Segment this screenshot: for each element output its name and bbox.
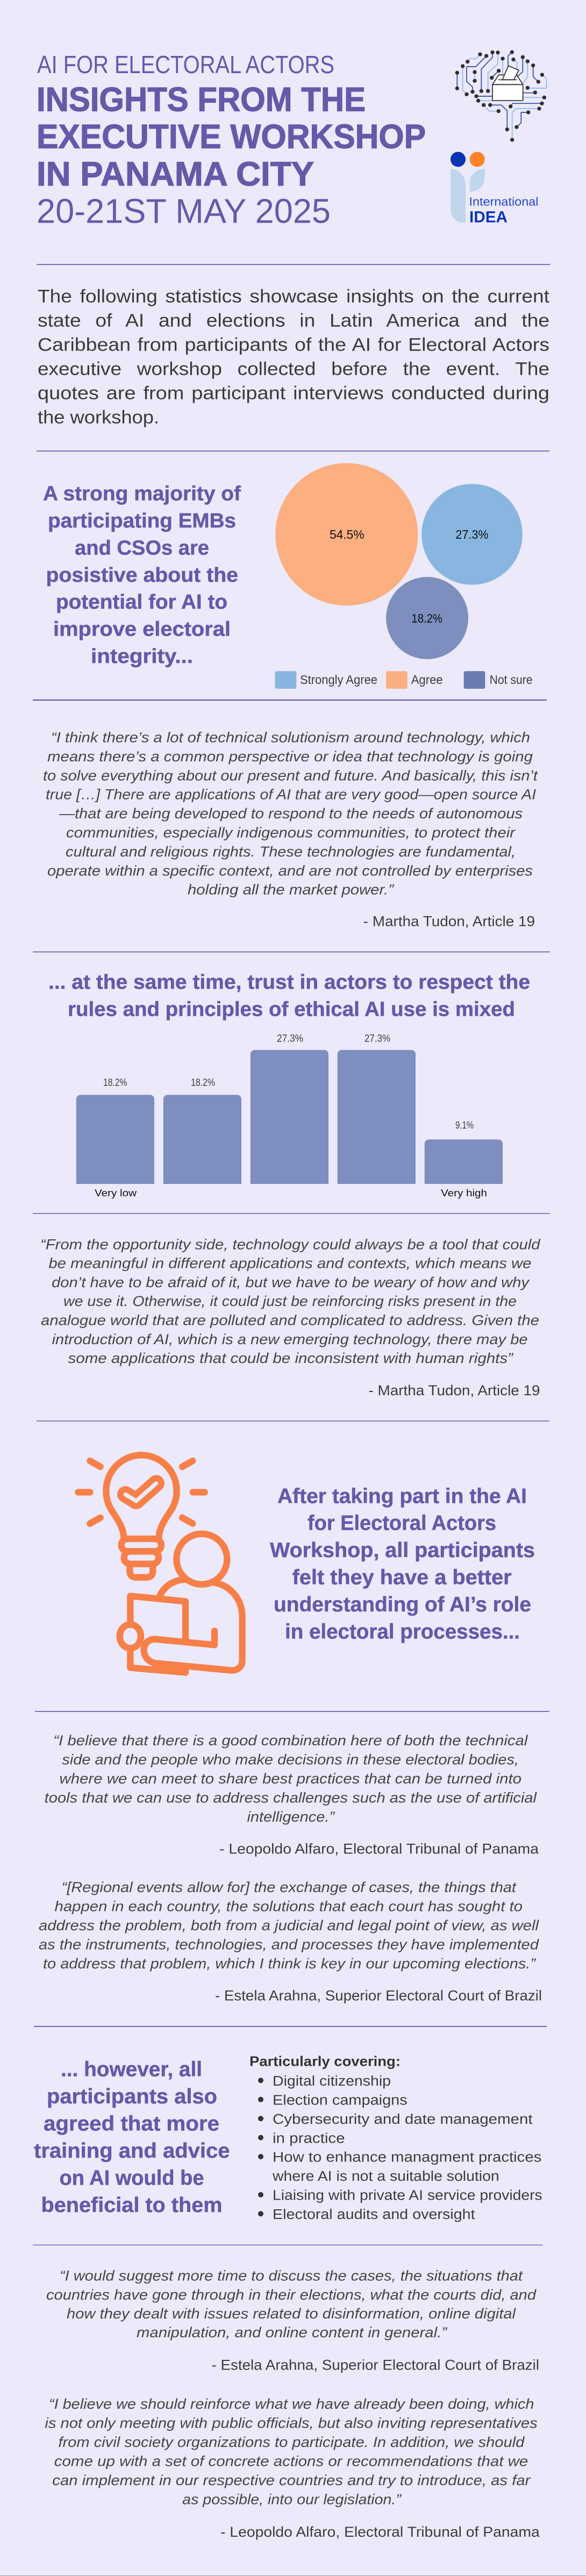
quote 5 attribution: - Estela Arahna, Superior Electoral Court of Brazil (212, 2357, 539, 2373)
quote 3: tools that we can use to address challenges such as the use of artificial (45, 1789, 537, 1806)
quote 2: introduction of AI, which is a new emerging technology, there may be (52, 1331, 528, 1347)
title: event name: AI FOR ELECTORAL ACTORS (37, 51, 334, 79)
quote 1: —that are being developed to respond to the needs of autonomous (59, 805, 523, 822)
bar chart: trust in actors (76, 1033, 503, 1198)
quote 2: we use it. Otherwise, it could just be reinforcing risks present in the (63, 1293, 517, 1309)
quote 1 (43, 729, 539, 929)
quote 6 attribution: - Leopoldo Alfaro, Electoral Tribunal of Panama (220, 2524, 540, 2540)
quote 6: is not only meeting with public officials, but also inviting representatives (45, 2415, 538, 2431)
heading: better understanding: After taking part in the AI (277, 1485, 527, 1508)
bubble chart: 27.3% (455, 527, 489, 541)
quote 3 (45, 1732, 539, 1857)
heading: more training needed: agreed that more (44, 2113, 219, 2136)
quote 2: “From the opportunity side, technology could always be a tool that could (40, 1236, 541, 1252)
heading: more training needed: on AI would be (59, 2167, 204, 2190)
chart legend: Strongly Agree (300, 673, 377, 687)
quote 2: analogue world that are polluted and complicated to address. Given the (41, 1312, 539, 1328)
intro paragraph (38, 286, 550, 427)
bubble chart: 18.2% (411, 611, 442, 625)
title: main heading: EXECUTIVE WORKSHOP (37, 118, 426, 156)
heading: more training needed: ... however, all (61, 2058, 202, 2081)
list: particularly covering: Election campaigns (273, 2093, 408, 2108)
quote 4 attribution: - Estela Arahna, Superior Electoral Court of Brazil (215, 1987, 542, 2003)
quote 1 attribution: - Martha Tudon, Article 19 (363, 913, 535, 929)
quote 1: to solve everything about our present and future. And basically, this isn’t (43, 767, 539, 783)
list: particularly covering: Electoral audits and oversight (273, 2207, 475, 2222)
heading: more training needed: training and advice (34, 2139, 230, 2163)
heading: strong majority positive (43, 483, 241, 668)
quote 4: address the problem, both from a judicial and legal point of view, as well (39, 1917, 539, 1933)
quote 5: “I would suggest more time to discuss the cases, the situations that (60, 2268, 524, 2284)
quote 4 (39, 1879, 542, 2003)
quote 2: be meaningful in different applications and contexts, which means we (48, 1255, 531, 1272)
icon: lightbulb and person with document (78, 1455, 242, 1673)
logo: International IDEA: International (469, 195, 539, 209)
bar chart: trust in actors: Very low (95, 1187, 137, 1198)
icon: circuit brain with ballot box (455, 50, 547, 142)
quote 2 attribution: - Martha Tudon, Article 19 (369, 1382, 540, 1398)
intro paragraph: state of AI and elections in Latin America and the (38, 310, 549, 331)
intro paragraph: quotes are from participant interviews conducted during (38, 383, 549, 403)
quote 1: holding all the market power.” (188, 882, 394, 898)
title: date: 20-21ST MAY 2025 (37, 191, 331, 230)
quote 4: to address that problem, which I think is key in our upcoming elections.” (43, 1956, 536, 1972)
quote 6: can implement in our respective countries and try to introduce, as far (52, 2472, 531, 2488)
chart legend (275, 671, 533, 689)
heading: more training needed: beneficial to them (41, 2194, 222, 2217)
quote 2: don’t have to be afraid of it, but we have to be weary of how and why (52, 1274, 530, 1290)
list: particularly covering: Liaising with private AI service providers (273, 2188, 542, 2203)
quote 4: as the instruments, technologies, and processes they have implemented (39, 1937, 539, 1953)
quote 5: countries have gone through in their elections, what the courts did, and (46, 2287, 537, 2303)
quote 3: where we can meet to share best practices that can be turned into (59, 1771, 521, 1787)
list: particularly covering (249, 2053, 542, 2222)
list: particularly covering: Particularly covering: (249, 2053, 401, 2069)
bar chart: trust in actors: Very high (441, 1187, 487, 1198)
quote 2: some applications that could be inconsistent with human rights” (68, 1350, 513, 1366)
heading: trust is mixed: ... at the same time, trust in actors to respect the (48, 971, 530, 994)
heading: better understanding: in electoral processes... (285, 1620, 520, 1643)
quote 3 attribution: - Leopoldo Alfaro, Electoral Tribunal of Panama (219, 1841, 539, 1857)
quote 6: come up with a set of concrete actions or recommendations that we (54, 2453, 528, 2469)
intro paragraph: Caribbean from participants of the AI for Electoral Actors (38, 334, 549, 355)
quote 3: intelligence.” (247, 1809, 335, 1825)
quote 6: “I believe we should reinforce what we have already been doing, which (49, 2396, 534, 2412)
quote 5: manipulation, and online content in general.” (137, 2324, 447, 2340)
quote 1: cultural and religious rights. These technologies are fundamental, (66, 844, 516, 860)
heading: strong majority positive: A strong majority of (43, 483, 241, 505)
quote 1: operate within a specific context, and are not controlled by enterprises (47, 862, 533, 879)
bar chart: trust in actors: 27.3% (365, 1033, 390, 1044)
quote 3: “I believe that there is a good combination here of both the technical (53, 1732, 528, 1749)
quote 6: from civil society organizations to participate. In addition, we should (58, 2434, 525, 2450)
logo: International IDEA: IDEA (469, 208, 508, 226)
heading: better understanding: for Electoral Actors (308, 1512, 496, 1535)
quote 4: happen in each country, the solutions that each court has sought to (55, 1898, 523, 1914)
bubble chart (275, 463, 523, 659)
title: main heading (37, 81, 426, 193)
intro paragraph: The following statistics showcase insights on the current (38, 286, 550, 306)
heading: strong majority positive: potential for AI to (56, 591, 227, 613)
quote 1: means there’s a common perspective or idea that technology is going (47, 748, 533, 765)
bar chart: trust in actors: 27.3% (277, 1033, 303, 1044)
heading: strong majority positive: improve electoral (53, 618, 231, 641)
title: main heading: INSIGHTS FROM THE (37, 81, 366, 118)
heading: trust is mixed: rules and principles of ethical AI use is mixed (68, 998, 515, 1021)
list: particularly covering: where AI is not a suitable solution (272, 2169, 499, 2184)
heading: more training needed: participants also (47, 2085, 217, 2108)
list: particularly covering: in practice (273, 2131, 345, 2146)
heading: strong majority positive: integrity... (91, 645, 193, 668)
chart legend: Not sure (490, 673, 533, 687)
heading: better understanding (270, 1485, 535, 1643)
heading: trust is mixed (48, 971, 530, 1021)
heading: strong majority positive: posistive about the (46, 564, 238, 587)
heading: strong majority positive: and CSOs are (75, 537, 209, 559)
title block (37, 51, 426, 230)
heading: strong majority positive: participating EMBs (48, 510, 236, 532)
quote 6: as possible, into our legislation.” (182, 2491, 402, 2507)
heading: better understanding: understanding of AI’s role (274, 1593, 531, 1616)
intro paragraph: the workshop. (38, 407, 159, 427)
list: particularly covering: Digital citizenship (273, 2074, 391, 2089)
bubble chart: 54.5% (330, 527, 365, 541)
quote 1: “I think there’s a lot of technical solutionism around technology, which (51, 729, 530, 745)
quote 4: “[Regional events allow for] the exchange of cases, the things that (62, 1879, 517, 1895)
quote 1: true […] There are applications of AI that are very good—open source AI (46, 787, 537, 803)
quote 2 (40, 1236, 541, 1398)
heading: more training needed (34, 2058, 230, 2217)
quote 6 (45, 2396, 540, 2540)
title: main heading: IN PANAMA CITY (37, 155, 314, 193)
quote 1: communities, especially indigenous communities, to protect their (66, 825, 516, 841)
intro paragraph: executive workshop collected before the event. The (38, 359, 549, 379)
list: particularly covering: Cybersecurity and date management (273, 2112, 533, 2127)
quote 5 (46, 2268, 539, 2373)
list: particularly covering: How to enhance managment practices (273, 2150, 541, 2165)
logo: International IDEA (451, 152, 539, 226)
bar chart: trust in actors: 18.2% (191, 1078, 215, 1089)
chart legend: Agree (411, 673, 443, 687)
quote 3: side and the people who make decisions in these electoral bodies, (62, 1752, 519, 1768)
heading: better understanding: felt they have a better (292, 1566, 512, 1589)
bar chart: trust in actors: 9.1% (455, 1120, 474, 1131)
quote 5: how they dealt with issues related to disinformation, online digital (67, 2306, 516, 2322)
heading: better understanding: Workshop, all participants (270, 1539, 535, 1562)
bar chart: trust in actors: 18.2% (103, 1078, 127, 1089)
